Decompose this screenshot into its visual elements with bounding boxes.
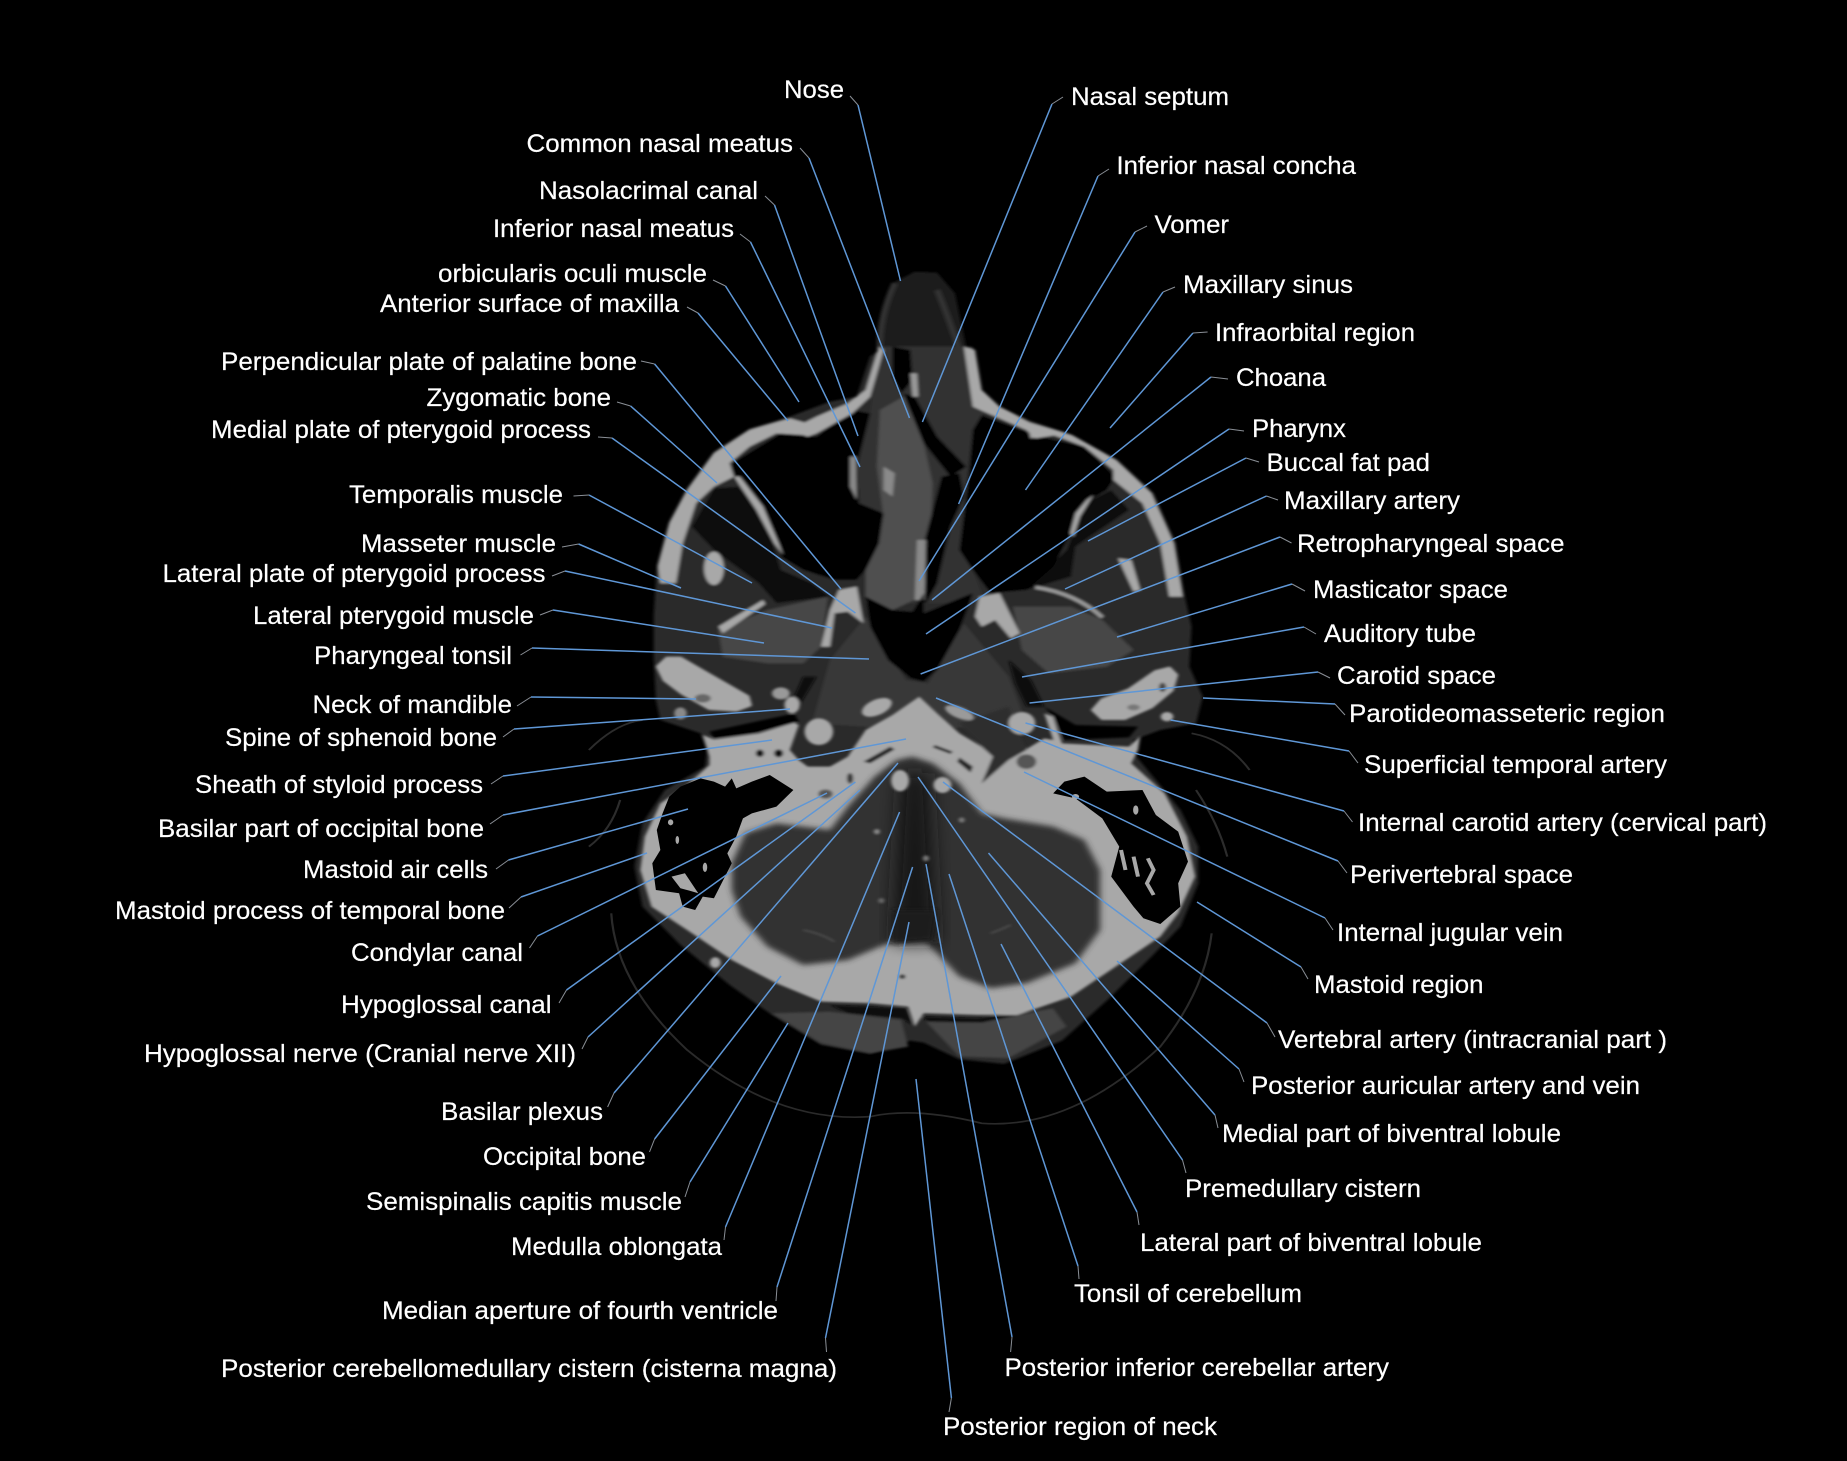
label: Posterior region of neck bbox=[916, 1079, 1218, 1441]
label: Lateral part of biventral lobule bbox=[1001, 944, 1482, 1257]
label: Posterior auricular artery and vein: Posterior auricular artery and vein bbox=[1251, 1072, 1640, 1100]
label: orbicularis oculi muscle: orbicularis oculi muscle bbox=[438, 260, 707, 288]
label: Buccal fat pad bbox=[1088, 449, 1430, 541]
label: Anterior surface of maxilla bbox=[380, 290, 788, 421]
label: Maxillary artery bbox=[1065, 487, 1461, 589]
label: Neck of mandible bbox=[312, 691, 696, 719]
label: Maxillary artery: Maxillary artery bbox=[1284, 487, 1461, 515]
label: Masticator space bbox=[1117, 576, 1508, 637]
label: Neck of mandible: Neck of mandible bbox=[312, 691, 512, 719]
label: Posterior cerebellomedullary cistern (cisterna magna): Posterior cerebellomedullary cistern (cisterna magna) bbox=[221, 1355, 837, 1383]
label: Medial part of biventral lobule: Medial part of biventral lobule bbox=[1222, 1120, 1561, 1148]
label: Pharyngeal tonsil: Pharyngeal tonsil bbox=[314, 642, 512, 670]
label: Hypoglossal canal bbox=[341, 782, 855, 1019]
label: Carotid space: Carotid space bbox=[1337, 662, 1496, 690]
skull base, cerebellum and mastoids bbox=[589, 658, 1250, 1124]
label: Perivertebral space bbox=[936, 698, 1573, 889]
label: Medulla oblongata: Medulla oblongata bbox=[511, 1233, 722, 1261]
label: Medial plate of pterygoid process bbox=[211, 416, 855, 613]
label: Buccal fat pad: Buccal fat pad bbox=[1266, 449, 1430, 477]
label: Superficial temporal artery: Superficial temporal artery bbox=[1364, 751, 1668, 779]
label: Maxillary sinus: Maxillary sinus bbox=[1183, 271, 1353, 299]
label: Mastoid region bbox=[1197, 902, 1484, 999]
label: Vomer bbox=[919, 211, 1229, 581]
label: Perpendicular plate of palatine bone: Perpendicular plate of palatine bone bbox=[221, 348, 637, 376]
label: Premedullary cistern bbox=[918, 777, 1421, 1203]
label: Auditory tube bbox=[1022, 620, 1476, 677]
label: Mastoid air cells bbox=[303, 809, 688, 884]
label: Internal jugular vein bbox=[1024, 772, 1563, 947]
label: Posterior inferior cerebellar artery bbox=[926, 864, 1390, 1382]
label: Mastoid process of temporal bone: Mastoid process of temporal bone bbox=[115, 897, 505, 925]
label: Posterior region of neck: Posterior region of neck bbox=[943, 1413, 1218, 1441]
label: Pharynx: Pharynx bbox=[1252, 415, 1347, 443]
label: Basilar part of occipital bone: Basilar part of occipital bone bbox=[158, 815, 484, 843]
label: Spine of sphenoid bone bbox=[225, 709, 790, 752]
label: Retropharyngeal space bbox=[921, 530, 1564, 674]
label: Common nasal meatus bbox=[526, 130, 910, 418]
label: Perivertebral space: Perivertebral space bbox=[1350, 861, 1573, 889]
label: Temporalis muscle bbox=[349, 481, 752, 583]
label: Medulla oblongata bbox=[511, 812, 900, 1261]
label: Hypoglossal nerve (Cranial nerve XII): Hypoglossal nerve (Cranial nerve XII) bbox=[144, 1040, 576, 1068]
label: Inferior nasal meatus: Inferior nasal meatus bbox=[493, 215, 734, 243]
label: Nose: Nose bbox=[784, 76, 844, 104]
axial CT scan of head bbox=[589, 272, 1250, 1124]
label: Inferior nasal concha bbox=[959, 152, 1356, 504]
label: Mastoid process of temporal bone bbox=[115, 853, 647, 925]
label: Parotideomasseteric region: Parotideomasseteric region bbox=[1349, 700, 1665, 728]
label: Basilar plexus bbox=[441, 763, 898, 1126]
label: Occipital bone bbox=[483, 976, 781, 1171]
mastoid air cells bbox=[652, 775, 1188, 924]
label: Masseter muscle bbox=[361, 530, 681, 588]
label: Posterior auricular artery and vein bbox=[1117, 961, 1640, 1100]
soft tissue and facial bones bbox=[634, 272, 1203, 1064]
label: Choana: Choana bbox=[1236, 364, 1326, 392]
label: Tonsil of cerebellum bbox=[949, 874, 1302, 1308]
label: Infraorbital region bbox=[1110, 319, 1415, 428]
label: Pharyngeal tonsil bbox=[314, 642, 869, 670]
label: Superficial temporal artery bbox=[1170, 720, 1668, 779]
label: Nasolacrimal canal bbox=[539, 177, 858, 436]
label: Medial plate of pterygoid process: Medial plate of pterygoid process bbox=[211, 416, 591, 444]
label: Zygomatic bone bbox=[426, 384, 717, 483]
label: Sheath of styloid process: Sheath of styloid process bbox=[195, 771, 483, 799]
label: Choana bbox=[932, 364, 1326, 600]
label: Nose bbox=[784, 76, 900, 281]
label: Occipital bone: Occipital bone bbox=[483, 1143, 646, 1171]
label: Hypoglossal nerve (Cranial nerve XII) bbox=[144, 790, 860, 1068]
label: Nasal septum: Nasal septum bbox=[1071, 83, 1229, 111]
label: Masticator space: Masticator space bbox=[1313, 576, 1508, 604]
label: Condylar canal bbox=[351, 793, 827, 967]
label: Lateral plate of pterygoid process bbox=[162, 560, 832, 628]
label: Internal carotid artery (cervical part) bbox=[1026, 723, 1767, 837]
label: Common nasal meatus: Common nasal meatus bbox=[526, 130, 793, 158]
label: Median aperture of fourth ventricle bbox=[382, 867, 913, 1325]
label: Posterior inferior cerebellar artery: Posterior inferior cerebellar artery bbox=[1004, 1354, 1390, 1382]
label: Spine of sphenoid bone: Spine of sphenoid bone bbox=[225, 724, 497, 752]
label: Mastoid region: Mastoid region bbox=[1314, 971, 1484, 999]
label: Condylar canal: Condylar canal bbox=[351, 939, 523, 967]
label: Nasolacrimal canal: Nasolacrimal canal bbox=[539, 177, 758, 205]
label: Auditory tube: Auditory tube bbox=[1324, 620, 1476, 648]
label: Carotid space bbox=[1030, 662, 1496, 703]
label: Pharynx bbox=[926, 415, 1347, 634]
label: Masseter muscle: Masseter muscle bbox=[361, 530, 556, 558]
label: Lateral pterygoid muscle bbox=[253, 602, 764, 643]
label: Hypoglossal canal: Hypoglossal canal bbox=[341, 991, 552, 1019]
label: Semispinalis capitis muscle: Semispinalis capitis muscle bbox=[366, 1188, 682, 1216]
label: Vertebral artery (intracranial part ) bbox=[943, 782, 1667, 1054]
label: Internal jugular vein: Internal jugular vein bbox=[1337, 919, 1563, 947]
label: Premedullary cistern: Premedullary cistern bbox=[1185, 1175, 1421, 1203]
label: Vomer: Vomer bbox=[1154, 211, 1229, 239]
label: Maxillary sinus bbox=[1026, 271, 1353, 490]
label: Zygomatic bone: Zygomatic bone bbox=[426, 384, 611, 412]
label: Lateral plate of pterygoid process: Lateral plate of pterygoid process bbox=[162, 560, 546, 588]
label: Sheath of styloid process bbox=[195, 740, 772, 799]
label: Basilar part of occipital bone bbox=[158, 739, 906, 843]
label: Median aperture of fourth ventricle: Median aperture of fourth ventricle bbox=[382, 1297, 778, 1325]
label: Tonsil of cerebellum: Tonsil of cerebellum bbox=[1074, 1280, 1302, 1308]
label: Basilar plexus: Basilar plexus bbox=[441, 1098, 603, 1126]
head holder and skin lines bbox=[611, 913, 1212, 1124]
label: Nasal septum bbox=[922, 83, 1229, 422]
label: Inferior nasal concha: Inferior nasal concha bbox=[1116, 152, 1356, 180]
label: Vertebral artery (intracranial part ): Vertebral artery (intracranial part ) bbox=[1278, 1026, 1667, 1054]
label: Posterior cerebellomedullary cistern (cisterna magna) bbox=[221, 922, 909, 1383]
label: Temporalis muscle: Temporalis muscle bbox=[349, 481, 563, 509]
label: Inferior nasal meatus bbox=[493, 215, 860, 467]
label: orbicularis oculi muscle bbox=[438, 260, 799, 402]
label: Semispinalis capitis muscle bbox=[366, 1023, 788, 1216]
label: Internal carotid artery (cervical part): Internal carotid artery (cervical part) bbox=[1358, 809, 1767, 837]
label: Retropharyngeal space: Retropharyngeal space bbox=[1297, 530, 1564, 558]
label: Medial part of biventral lobule bbox=[988, 853, 1561, 1148]
label: Perpendicular plate of palatine bone bbox=[221, 348, 841, 589]
label: Infraorbital region: Infraorbital region bbox=[1215, 319, 1415, 347]
label: Lateral part of biventral lobule: Lateral part of biventral lobule bbox=[1140, 1229, 1482, 1257]
label: Lateral pterygoid muscle: Lateral pterygoid muscle bbox=[253, 602, 534, 630]
label: Mastoid air cells: Mastoid air cells bbox=[303, 856, 488, 884]
label: Parotideomasseteric region bbox=[1203, 698, 1665, 728]
label: Anterior surface of maxilla: Anterior surface of maxilla bbox=[380, 290, 679, 318]
